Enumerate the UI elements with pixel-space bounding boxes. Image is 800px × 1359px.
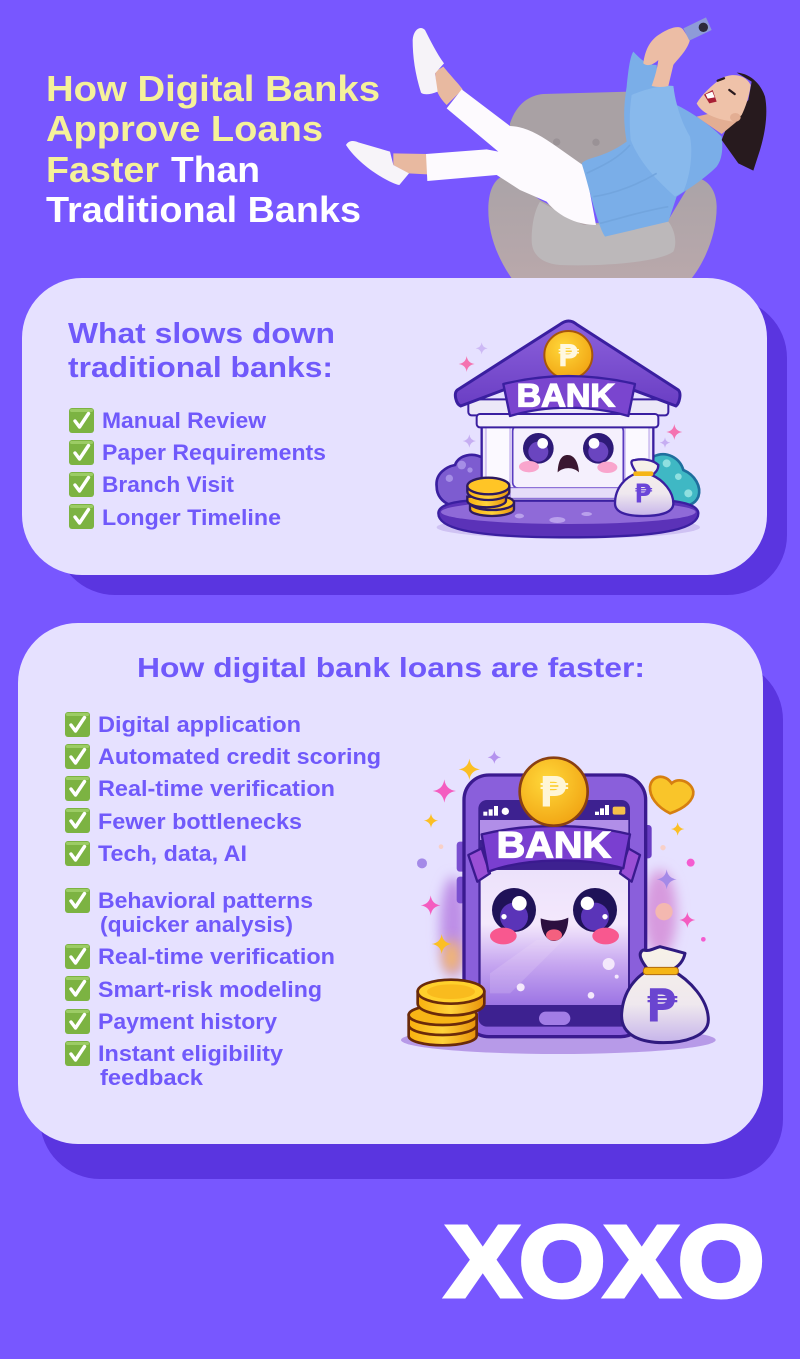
photo: woman on armchair with phone [346, 17, 766, 278]
checklist: digital bank advantages: Smart-risk modeling [98, 977, 322, 1002]
checklist: traditional bank slowdowns: Branch Visit [102, 472, 235, 497]
checklist: digital bank advantages: Digital application [98, 712, 301, 737]
heading: what slows down [68, 318, 335, 384]
title: Approve Loans [46, 108, 323, 149]
panel: what slows down traditional banks [22, 278, 787, 595]
title [46, 68, 380, 230]
heading: how digital bank loans are faster: How digital bank loans are faster: [137, 652, 645, 683]
illustration: happy phone bank: ₱ [539, 768, 568, 817]
checklist: digital bank advantages: Behavioral patterns [98, 888, 313, 913]
title: How Digital Banks [46, 68, 380, 109]
checklist: digital bank advantages: Fewer bottlenecks [98, 809, 302, 834]
checklist: digital bank advantages: Real-time verification [98, 944, 335, 969]
title: Traditional Banks [46, 189, 361, 230]
heading: what slows down: What slows down [68, 318, 335, 350]
checklist: digital bank advantages: Payment history [98, 1009, 278, 1034]
checklist: digital bank advantages: Instant eligibility [98, 1041, 284, 1066]
checklist: digital bank advantages: Real-time verification [98, 776, 335, 801]
illustration: happy phone bank: BANK [497, 825, 612, 866]
illustration: happy phone bank [401, 751, 716, 1054]
checklist: digital bank advantages: feedback [100, 1065, 204, 1090]
checklist: digital bank advantages: (quicker analysis) [100, 912, 293, 937]
illustration: worried bank building [437, 321, 700, 539]
title: Faster [46, 149, 159, 190]
illustration: worried bank building: ₱ [558, 339, 580, 374]
checklist: traditional bank slowdowns: Longer Timeline [102, 505, 281, 530]
title: Than [171, 149, 260, 190]
checklist: digital bank advantages: Tech, data, AI [98, 841, 247, 866]
illustration: happy phone bank: ₱ [646, 980, 678, 1033]
checklist: traditional bank slowdowns: Paper Requirements [102, 440, 326, 465]
checklist: traditional bank slowdowns [69, 408, 326, 530]
panel: how digital bank loans are faster [18, 623, 783, 1179]
checklist: traditional bank slowdowns: Manual Review [102, 408, 267, 433]
illustration: worried bank building: ₱ [635, 479, 653, 509]
illustration: worried bank building: BANK [517, 377, 615, 413]
checklist: digital bank advantages: Automated credit scoring [98, 744, 381, 769]
heading: what slows down: traditional banks: [68, 352, 333, 384]
logo: XOXO: XOXO [446, 1206, 764, 1318]
checklist: digital bank advantages [65, 712, 381, 1090]
